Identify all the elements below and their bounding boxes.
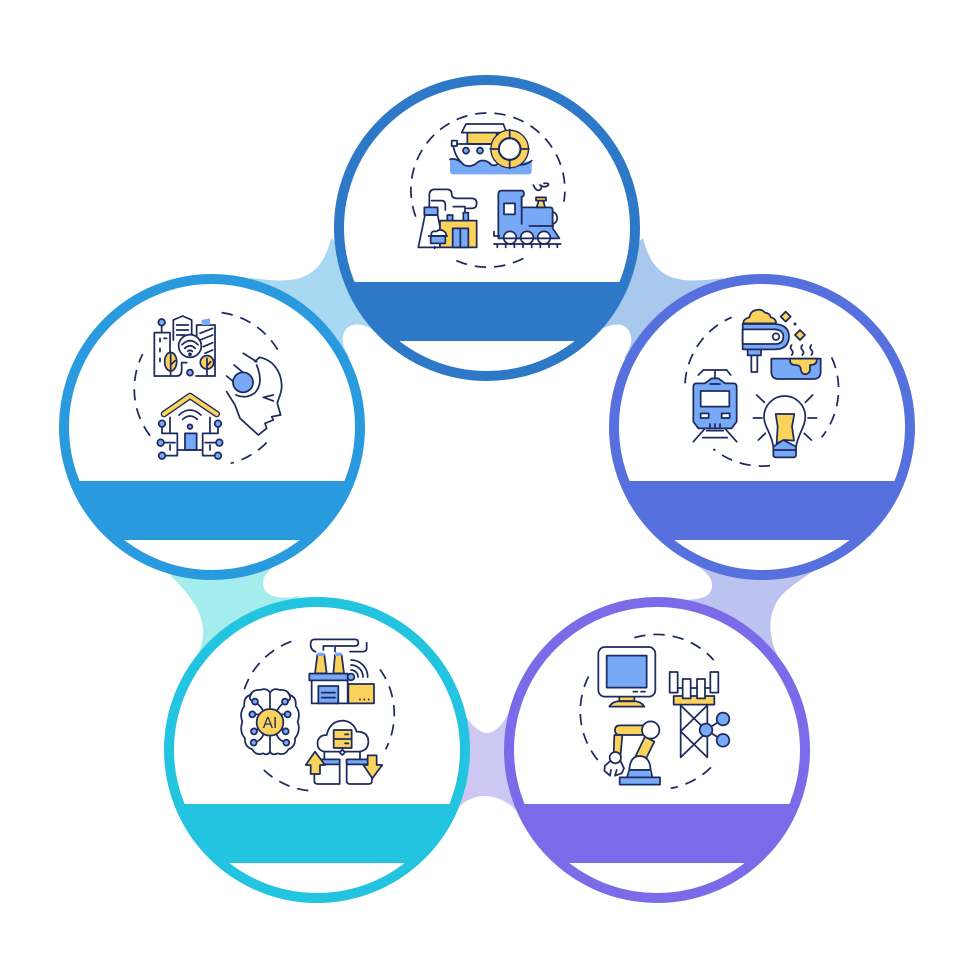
icon: power plant [418, 189, 477, 248]
icon: smart home [157, 396, 223, 459]
connector: top to right [574, 238, 724, 358]
panel: left circle [64, 279, 360, 575]
panel: bottom right circle [509, 602, 805, 898]
icon: paddle steamer [450, 124, 532, 174]
icon: light bulb [753, 395, 817, 457]
connector: right to bottom right [680, 560, 815, 660]
ring: right [614, 279, 910, 575]
icon: steam locomotive [494, 183, 561, 247]
icon: AI brain: AI [263, 715, 277, 732]
panel: top circle [339, 80, 635, 376]
icon group: ore conveyor, train, light bulb [685, 310, 839, 466]
ring: top [339, 80, 635, 376]
icon: electric train [693, 370, 737, 442]
icon: AI head with headset [227, 353, 282, 435]
panel: right circle [614, 279, 910, 575]
icon: robot arm [604, 721, 660, 785]
icon group: computer, cell tower, robot arm [580, 634, 729, 788]
ring: left [64, 279, 360, 575]
connector: left to bottom left [170, 560, 300, 660]
icon: computer monitor [598, 647, 655, 707]
icon group: ship, factory, steam train [411, 113, 565, 267]
panel: bottom left circle [169, 602, 465, 898]
band: bottom right [519, 804, 795, 863]
band: bottom left [179, 804, 455, 863]
ring: bottom left [169, 602, 465, 898]
ring: bottom right [509, 602, 805, 898]
band: right [624, 481, 900, 540]
icon: smart city [154, 316, 215, 376]
icon: ore conveyor and molten bowl [743, 310, 821, 379]
icon: smart factory [309, 639, 374, 703]
band: top [349, 282, 625, 341]
icon group: AI brain, smart factory, cloud storage [241, 639, 394, 791]
icon: cloud storage [306, 721, 382, 784]
band: left [74, 481, 350, 540]
connector: top to left [250, 238, 400, 358]
connector: bottom left to bottom right [456, 710, 516, 810]
icon: network tower [670, 672, 729, 757]
icon group: smart city, smart home, AI head [134, 313, 282, 463]
icon: AI brain [241, 689, 299, 754]
